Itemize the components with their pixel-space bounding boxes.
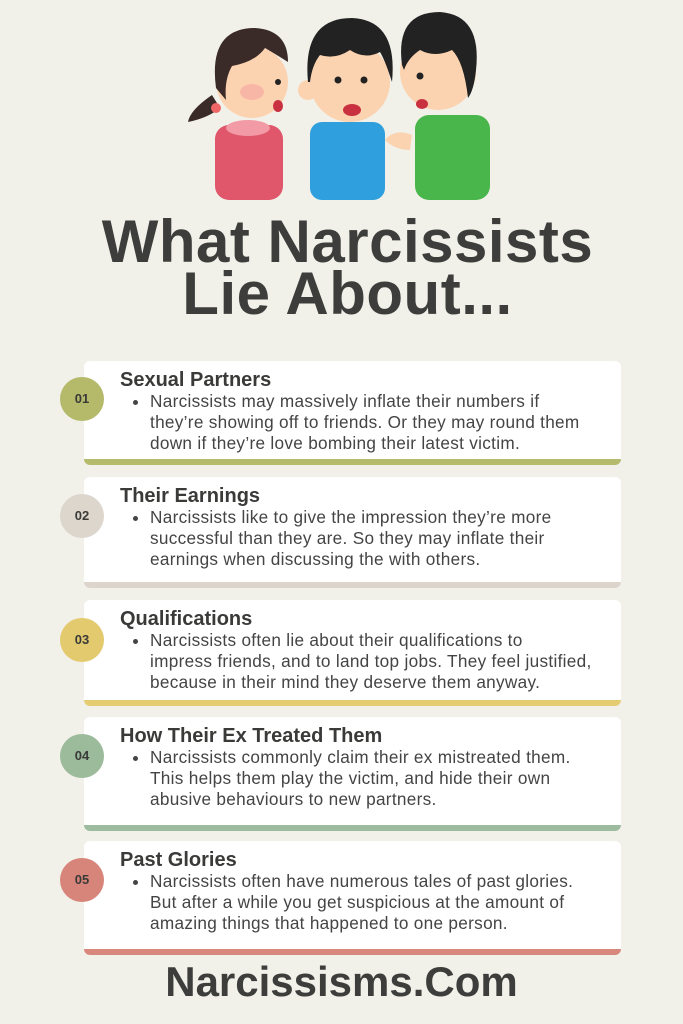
card 4: How Their Ex Treated Them bbox=[120, 725, 382, 747]
girl bbox=[188, 28, 288, 200]
card 5: Narcissists often have numerous tales of past glories. bbox=[150, 871, 573, 891]
card 5: But after a while you get suspicious at the amount of bbox=[150, 892, 564, 912]
badge 03: 03 bbox=[75, 632, 89, 647]
badge 02 bbox=[60, 494, 104, 538]
card 3 bbox=[84, 600, 621, 706]
title bbox=[102, 208, 593, 327]
card 3: Qualifications bbox=[120, 608, 252, 630]
footer: Narcissisms.Com bbox=[165, 958, 518, 1005]
card 1 bbox=[84, 361, 621, 465]
card 1: Sexual Partners bbox=[120, 369, 271, 391]
badge 02: 02 bbox=[75, 508, 89, 523]
card 1: Narcissists may massively inflate their numbers if bbox=[150, 391, 539, 411]
card 5: amazing things that happened to one person. bbox=[150, 913, 508, 933]
card 3: impress friends, and to land top jobs. They feel justified, bbox=[150, 651, 592, 671]
card 3: because in their mind they deserve them anyway. bbox=[150, 672, 540, 692]
card 4: This helps them play the victim, and hide their own bbox=[150, 768, 550, 788]
card 4: abusive behaviours to new partners. bbox=[150, 789, 437, 809]
card 4 bbox=[84, 717, 621, 831]
card 5: Past Glories bbox=[120, 849, 237, 871]
badge 01: 01 bbox=[75, 391, 89, 406]
badge 04: 04 bbox=[75, 748, 89, 763]
card 4: Narcissists commonly claim their ex mistreated them. bbox=[150, 747, 571, 767]
illustration: three kids bbox=[188, 12, 490, 200]
card 3: Narcissists often lie about their qualifications to bbox=[150, 630, 523, 650]
badge 05 bbox=[60, 858, 104, 902]
badge 05: 05 bbox=[75, 872, 89, 887]
card 2 bbox=[84, 477, 621, 588]
card 1: they’re showing off to friends. Or they may round them bbox=[150, 412, 580, 432]
badge 01 bbox=[60, 377, 104, 421]
boy blue bbox=[298, 18, 393, 200]
card 1: down if they’re love bombing their latest victim. bbox=[150, 433, 520, 453]
card 2: Narcissists like to give the impression they’re more bbox=[150, 507, 552, 527]
title: Lie About... bbox=[182, 260, 513, 327]
badge 03 bbox=[60, 618, 104, 662]
card 2: successful than they are. So they may inflate their bbox=[150, 528, 545, 548]
badge 04 bbox=[60, 734, 104, 778]
card 2: Their Earnings bbox=[120, 485, 260, 507]
card 2: earnings when discussing the with others. bbox=[150, 549, 480, 569]
title: What Narcissists bbox=[102, 208, 593, 275]
card 5 bbox=[84, 841, 621, 955]
boy green bbox=[385, 12, 490, 200]
